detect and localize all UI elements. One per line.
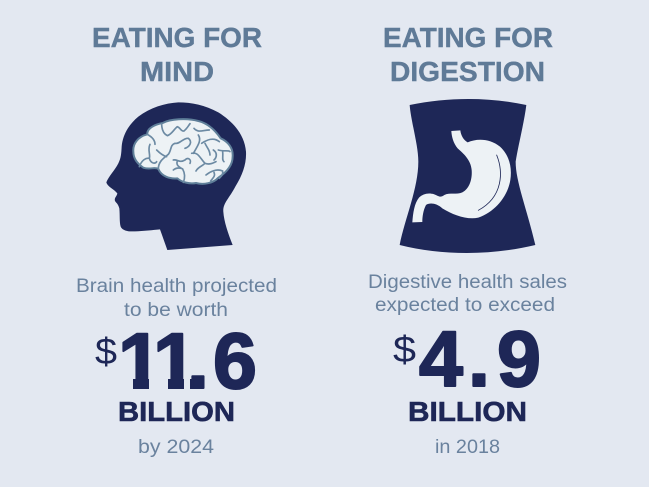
text: by 2024: by 2024 [138, 437, 214, 458]
stat: $4.9: $ [393, 329, 416, 370]
heading: eating for digestion: DIGESTION [390, 56, 545, 87]
label: billion: BILLION [408, 396, 527, 427]
stat: $11.6 [96, 332, 256, 390]
brain [133, 119, 233, 184]
icon: head with brain [106, 102, 246, 250]
icon: torso with stomach [400, 99, 535, 253]
stat: $11.6: 11.6 [118, 316, 257, 405]
heading: eating for mind [92, 22, 262, 87]
stat: $11.6: $ [95, 331, 117, 372]
text: brain health projected [76, 276, 277, 321]
text: digestive health sales [368, 272, 567, 316]
text: digestive health sales: Digestive health sales [368, 272, 567, 293]
stat: $4.9: 4.9 [419, 314, 541, 403]
text: brain health projected: Brain health projected [76, 276, 277, 297]
text: in 2018: in 2018 [435, 437, 500, 458]
label: billion: BILLION [118, 396, 235, 427]
heading: eating for mind: EATING FOR [92, 22, 262, 53]
panel: eating for mind [76, 22, 277, 458]
text: brain health projected: to be worth [124, 300, 228, 321]
heading: eating for digestion [383, 22, 553, 87]
text: digestive health sales: expected to exceed [375, 295, 555, 316]
heading: eating for digestion: EATING FOR [383, 22, 553, 53]
heading: eating for mind: MIND [140, 56, 214, 87]
stomach [412, 130, 511, 222]
panel: eating for digestion [368, 22, 567, 458]
